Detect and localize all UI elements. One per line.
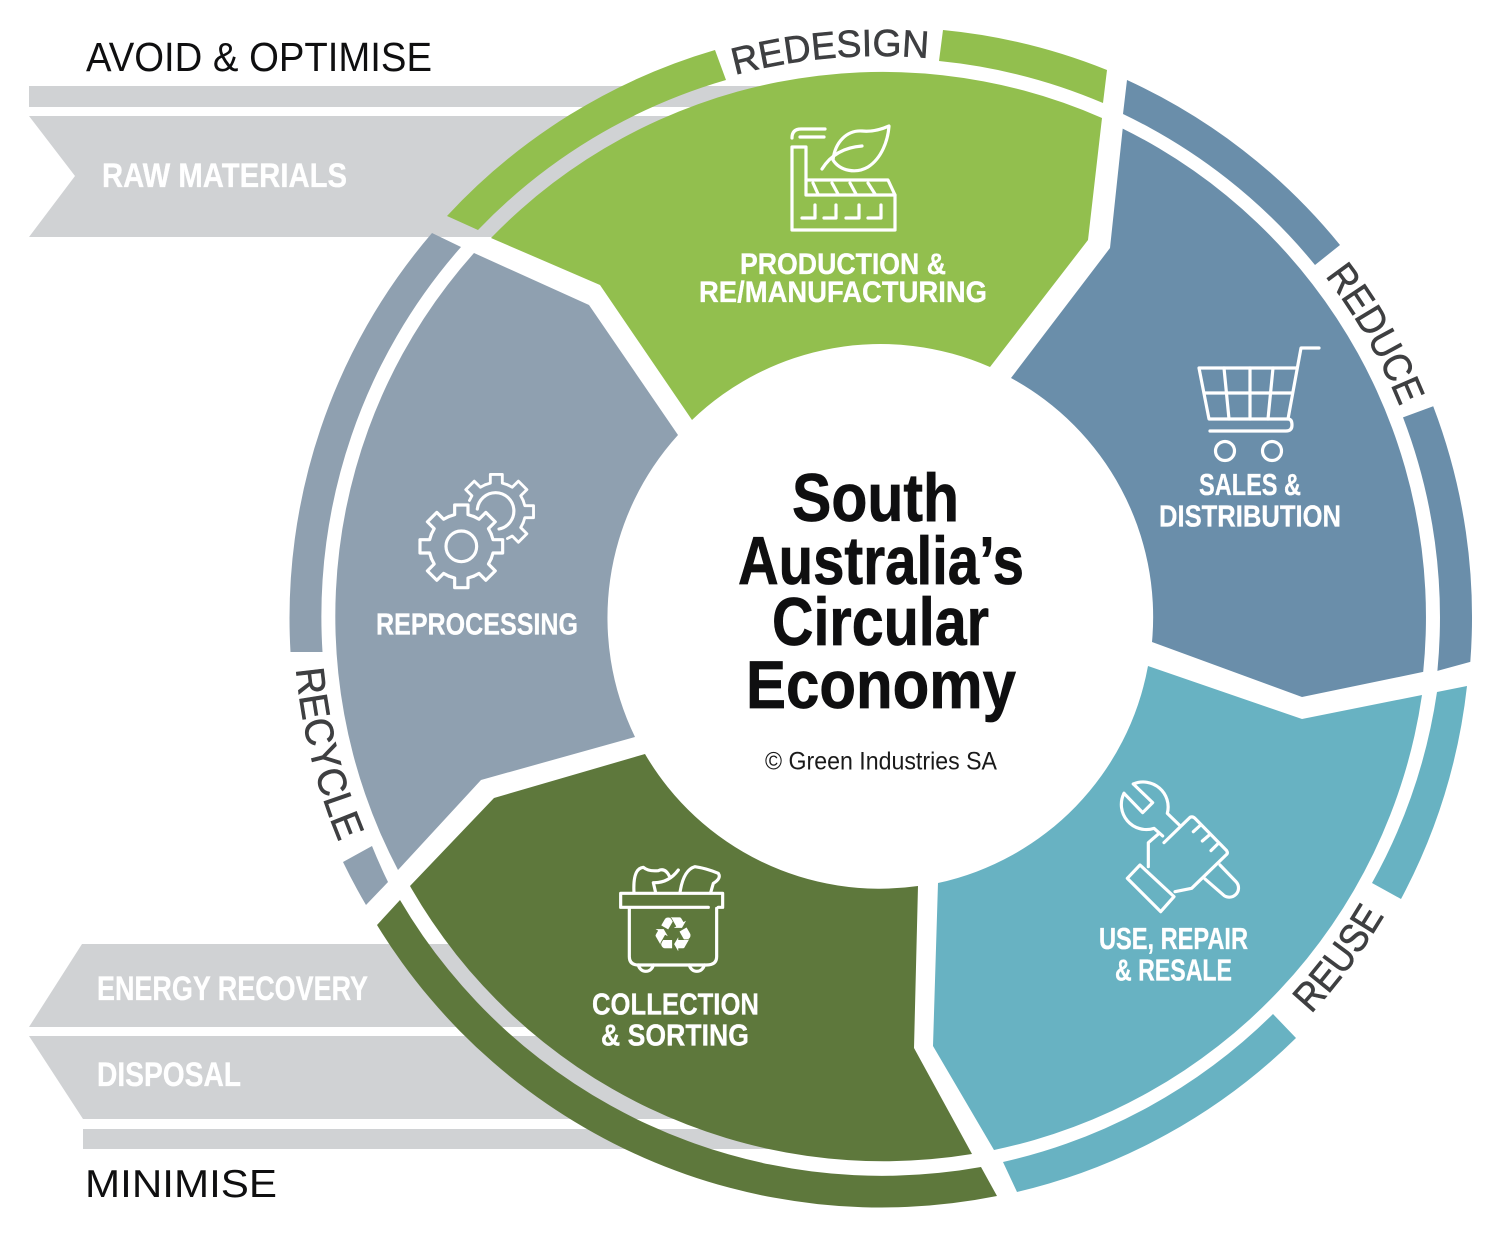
outer ring: minimise green arc bbox=[377, 900, 997, 1207]
heading: minimise: MINIMISE bbox=[85, 1163, 277, 1206]
label: sales and distribution: SALES & bbox=[1199, 467, 1301, 502]
label: use, repair and resale: USE, REPAIR bbox=[1099, 921, 1248, 956]
ring label: reduce: REDUCE bbox=[1326, 262, 1425, 406]
grey band: avoid and optimise bar bbox=[29, 86, 800, 107]
outer ring: redesign bbox=[447, 30, 1107, 230]
outer ring: recycle bbox=[290, 233, 461, 905]
icon: recycling bin: ♻ bbox=[651, 907, 695, 963]
panel: production and re/manufacturing bbox=[491, 72, 1102, 420]
grey band: minimise bar bbox=[83, 1129, 800, 1149]
label: collection and sorting bbox=[592, 986, 759, 1052]
panel: use, repair and resale bbox=[933, 666, 1422, 1150]
label: production and re/manufacturing bbox=[699, 248, 987, 309]
copyright credit: © Green Industries SA bbox=[765, 748, 997, 776]
grey band: disposal arrow bbox=[29, 1036, 800, 1119]
grey band: raw materials arrow bbox=[29, 116, 800, 237]
label: production and re/manufacturing: PRODUCTION & bbox=[740, 248, 946, 281]
label: use, repair and resale: & RESALE bbox=[1115, 952, 1232, 988]
label: disposal: DISPOSAL bbox=[97, 1056, 241, 1094]
panel: collection and sorting bbox=[410, 754, 972, 1161]
outer ring: reduce bbox=[1123, 80, 1472, 671]
ring label: reuse: REUSE bbox=[1292, 902, 1384, 1012]
ring label: recycle: RECYCLE bbox=[296, 668, 364, 841]
ring label: redesign: REDESIGN bbox=[731, 29, 928, 74]
outer ring: reuse bbox=[1003, 686, 1467, 1192]
label: raw materials: RAW MATERIALS bbox=[102, 157, 347, 195]
label: collection and sorting: COLLECTION bbox=[592, 986, 759, 1022]
label: sales and distribution: DISTRIBUTION bbox=[1159, 498, 1341, 534]
label: production and re/manufacturing: RE/MANUFACTURING bbox=[699, 276, 987, 309]
icon: factory with leaf bbox=[792, 126, 895, 230]
label: collection and sorting: & SORTING bbox=[601, 1018, 749, 1052]
icon: recycling bin bbox=[621, 867, 723, 971]
centre title: Circular bbox=[772, 584, 989, 660]
label: use, repair and resale bbox=[1099, 921, 1248, 988]
label: energy recovery: ENERGY RECOVERY bbox=[97, 970, 368, 1008]
label: reprocessing: REPROCESSING bbox=[376, 606, 578, 642]
label: sales and distribution bbox=[1159, 467, 1341, 534]
grey band: energy recovery arrow bbox=[29, 944, 800, 1027]
centre title: Economy bbox=[746, 647, 1016, 723]
icon: hand holding wrench bbox=[1121, 782, 1239, 912]
icon: gears bbox=[420, 474, 534, 588]
icon: shopping cart bbox=[1199, 348, 1319, 460]
centre title bbox=[738, 460, 1024, 723]
panel: sales and distribution bbox=[1011, 129, 1426, 697]
heading: avoid and optimise: AVOID & OPTIMISE bbox=[86, 34, 432, 80]
centre title: Australia’s bbox=[738, 523, 1024, 599]
centre title: South bbox=[792, 460, 959, 536]
panel: reprocessing bbox=[335, 253, 678, 870]
